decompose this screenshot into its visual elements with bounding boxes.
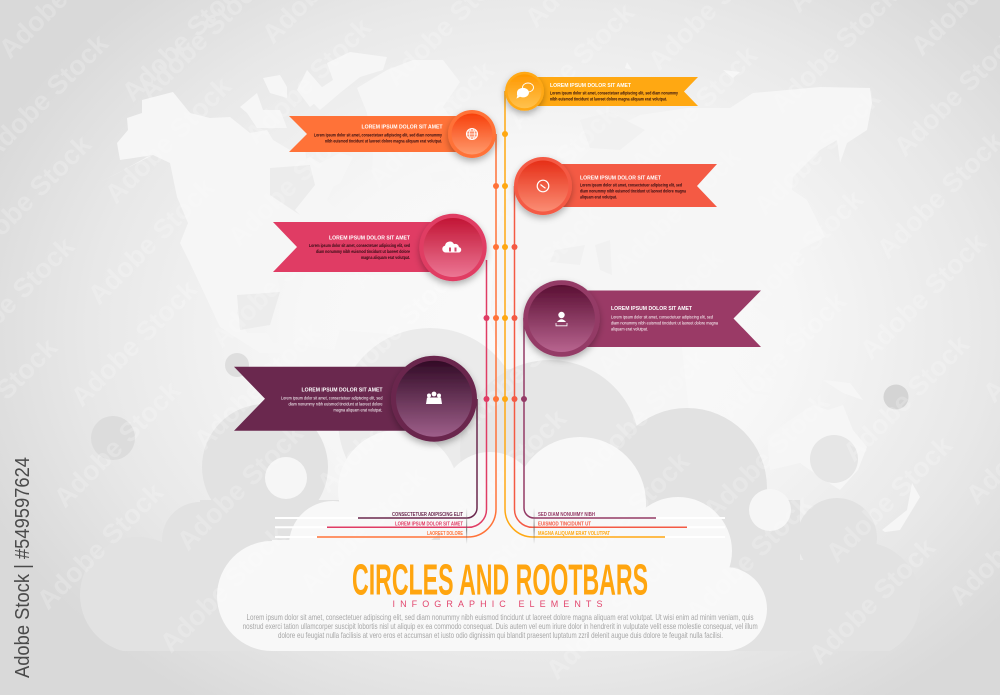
watermark: Adobe Stock — [697, 387, 836, 525]
watermark: Adobe Stock — [591, 243, 730, 381]
icon: speech bubbles — [516, 83, 534, 99]
watermark: Adobe Stock — [714, 286, 853, 424]
ribbon — [540, 164, 717, 207]
watermark: Adobe Stock — [625, 40, 764, 178]
watermark: Adobe Stock — [557, 446, 696, 584]
watermark: Adobe Stock — [171, 418, 310, 556]
text: LOREM IPSUM DOLOR SIT AMET — [302, 388, 383, 394]
panel: dark purple ribbon — [234, 356, 477, 442]
circle — [391, 356, 477, 442]
root labels right — [538, 512, 611, 537]
text: nibh euismod tincidunt ut laoreet dolore magna aliquam erat volutpat. — [550, 96, 667, 101]
dots: yellow — [502, 131, 508, 402]
map: hudson bay and gulf — [237, 165, 315, 330]
watermark: Adobe Stock — [731, 184, 870, 322]
root labels left: CONSECTETUER ADIPISCING ELIT — [392, 512, 464, 518]
map: iceland — [430, 170, 450, 182]
watermark: Adobe Stock — [99, 71, 238, 209]
watermark: Adobe Stock — [468, 200, 607, 338]
text: diam nonummy nibh euismod tincidunt ut laoreet dolore magna — [580, 189, 686, 194]
watermark: Adobe Stock — [434, 403, 573, 541]
dots: orange — [493, 183, 499, 402]
watermark: Adobe Stock — [311, 360, 450, 498]
map: south america — [320, 330, 480, 560]
subtitle: INFOGRAPHIC ELEMENTS — [392, 599, 602, 609]
line: purple — [524, 318, 656, 518]
watermark: Adobe Stock — [31, 477, 170, 615]
body paragraph: Lorem ipsum dolor sit amet, consectetuer adipiscing elit, sed diam nonummy nibh euismod tincidunt ut laoreet dolore magna aliquam erat volutpat. Ut wisi enim ad minim veniam, quis — [246, 612, 754, 622]
text: Lorem ipsum dolor sit amet, consectetuer adipiscing elit, sed diam nonummy — [314, 132, 442, 137]
icon: globe — [466, 128, 478, 140]
text: magna aliquam erat volutpat. — [334, 408, 382, 412]
watermark: Adobe Stock — [328, 258, 467, 396]
ribbon — [273, 222, 450, 272]
line: orange — [317, 134, 496, 537]
dots: red — [512, 244, 518, 402]
text: LOREM IPSUM DOLOR SIT AMET — [611, 306, 693, 312]
text: LOREM IPSUM DOLOR SIT AMET — [362, 125, 443, 131]
circle — [514, 157, 572, 215]
stock id vertical text: Adobe Stock | #549597624 — [12, 457, 34, 678]
watermark: Adobe Stock — [239, 12, 378, 150]
line: yellow — [505, 91, 665, 537]
watermark: Adobe Stock — [451, 301, 590, 439]
line: pink — [327, 260, 487, 527]
title: CIRCLES AND ROOTBARS — [352, 556, 648, 604]
root labels left: LOREM IPSUM DOLOR SIT AMET — [395, 522, 464, 528]
map: new zealand — [882, 483, 920, 532]
root labels left: LAOREET DOLORE — [427, 531, 463, 537]
text: diam nonummy nibh euismod tincidunt ut laoreet dolore — [288, 402, 383, 406]
text — [550, 83, 678, 101]
watermark: Adobe Stock — [294, 461, 433, 599]
watermark: Adobe Stock — [82, 172, 221, 310]
watermark: Adobe Stock — [837, 329, 976, 467]
text: Lorem ipsum dolor sit amet, consectetuer adipiscing elit, sed — [309, 243, 410, 248]
panel: yellow ribbon — [505, 72, 698, 111]
text: magna aliquam erat volutpat. — [361, 255, 410, 260]
ribbon — [560, 290, 761, 347]
line shadow ticks — [466, 508, 535, 544]
text: Lorem ipsum dolor sit amet, consectetuer adipiscing elit, sed — [611, 314, 713, 319]
ribbon — [234, 367, 430, 431]
watermark: Adobe Stock — [854, 227, 993, 365]
watermark: Adobe Stock — [485, 98, 624, 236]
body paragraph: dolore eu feugiat nulla facilisis at vero eros et accumsan et iusto odio dignissim qui blandit praesent luptatum zzril delenit augue duis dolore te feugait nulla facilisi. — [278, 630, 723, 640]
map: inland seas — [550, 112, 645, 275]
line junction dots — [484, 131, 527, 402]
watermark: Adobe Stock — [345, 157, 484, 295]
watermark: Adobe Stock — [48, 375, 187, 513]
ribbon — [289, 116, 470, 152]
watermark: Adobe Stock — [154, 520, 293, 658]
watermark: Adobe Stock — [748, 83, 887, 221]
watermark: Adobe Stock — [803, 532, 942, 670]
root labels right: EUISMOD TINCIDUNT UT — [538, 522, 592, 528]
watermark: Adobe Stock — [680, 489, 819, 627]
text: Lorem ipsum dolor sit amet, consectetuer adipiscing elit, sed — [281, 396, 383, 400]
text — [281, 388, 383, 412]
circle — [523, 280, 600, 357]
map: siberian islands — [625, 62, 740, 78]
watermark: Adobe Stock — [608, 141, 747, 279]
small white circles — [265, 457, 791, 531]
text: Lorem ipsum dolor sit amet, consectetuer adipiscing elit, sed — [580, 183, 682, 188]
white line extensions — [275, 518, 725, 537]
text: aliquam erat volutpat. — [611, 326, 648, 331]
ribbon — [530, 77, 698, 106]
text — [314, 125, 443, 143]
watermark: Adobe Stock — [502, 0, 641, 135]
watermark: Adobe Stock — [417, 504, 556, 642]
circle — [505, 72, 544, 111]
text — [580, 176, 686, 200]
line: red — [514, 186, 687, 527]
panel: orange ribbon — [289, 110, 496, 158]
body paragraph — [243, 612, 758, 640]
map: australia — [767, 405, 867, 490]
text: nibh euismod tincidunt ut laoreet dolore magna aliquam erat volutpat. — [325, 138, 442, 143]
panel: pink ribbon — [273, 214, 487, 281]
text: diam nonummy nibh euismod tincidunt ut laoreet dolore — [316, 249, 410, 254]
white cloud — [217, 430, 767, 651]
watermark: Adobe Stock — [820, 430, 959, 568]
icon: cloud upload — [442, 242, 461, 252]
text: LOREM IPSUM DOLOR SIT AMET — [550, 83, 632, 89]
icon: clock — [537, 180, 549, 192]
text: Lorem ipsum dolor sit amet, consectetuer adipiscing elit, sed diam nonummy — [550, 90, 678, 95]
map: eurasia and africa — [490, 87, 872, 470]
root labels right: MAGNA ALIQUAM ERAT VOLUTPAT — [538, 531, 611, 537]
icon: group of people — [426, 392, 442, 404]
world map — [100, 52, 920, 560]
map: arctic islands — [240, 52, 387, 128]
root lines — [317, 91, 687, 537]
text: diam nonummy nibh euismod tincidunt ut laoreet dolore magna — [611, 320, 718, 325]
map: indonesia — [730, 360, 863, 400]
root labels right: SED DIAM NONUMMY NIBH — [538, 512, 595, 518]
watermark: Adobe Stock — [574, 344, 713, 482]
watermark: Adobe Stock — [65, 274, 204, 412]
icon: person at desk — [556, 312, 567, 326]
watermark: Adobe Stock — [222, 114, 361, 252]
map: greenland — [357, 60, 460, 190]
text — [611, 306, 718, 331]
text: aliquam erat volutpat. — [580, 195, 617, 200]
circle — [448, 110, 496, 158]
watermark: Adobe Stock — [362, 55, 501, 193]
root labels left — [392, 512, 464, 537]
grey cloud — [80, 328, 920, 658]
text: LOREM IPSUM DOLOR SIT AMET — [580, 176, 662, 182]
panel: purple ribbon — [523, 280, 761, 357]
text — [309, 236, 411, 260]
line: dark purple — [358, 399, 477, 518]
body paragraph: nostrud exerci tation ullamcorper suscipit lobortis nisl ut aliquip ex ea commodo consequat. Duis autem vel eum iriure dolor in hendrerit in vulputate velit esse molestie consequat, vel illum — [243, 621, 758, 631]
watermark: Adobe Stock — [205, 215, 344, 353]
text: LOREM IPSUM DOLOR SIT AMET — [329, 236, 411, 242]
watermark: Adobe Stock — [188, 317, 327, 455]
map: north america — [100, 92, 400, 385]
panel: red ribbon — [514, 157, 717, 215]
dot: purple — [521, 396, 527, 402]
watermark: Adobe Stock — [540, 547, 679, 685]
circle — [419, 214, 487, 281]
dots: pink — [484, 315, 490, 402]
